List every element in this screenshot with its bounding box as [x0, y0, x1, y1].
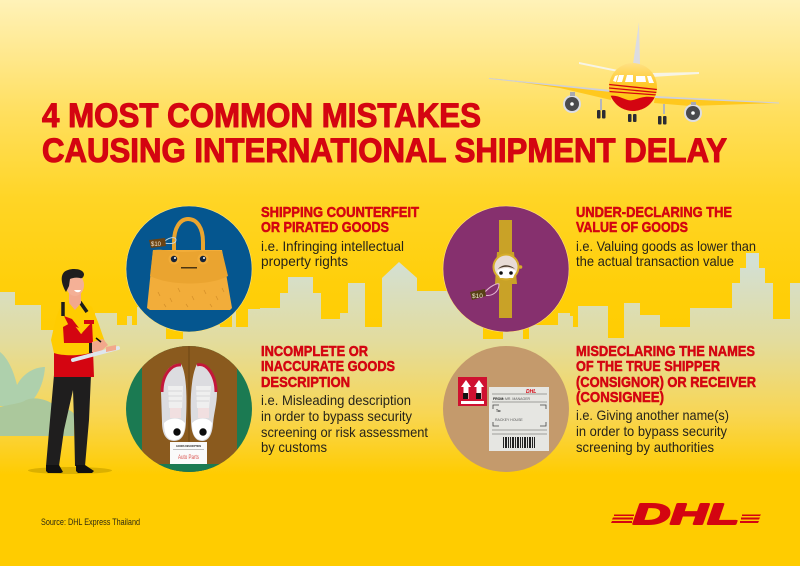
source note: Source: DHL Express Thailand	[41, 517, 140, 527]
text: under-declaring: the actual transaction value	[576, 253, 734, 269]
heading: misdeclaring names: OF THE TRUE SHIPPER	[576, 358, 720, 375]
icon: parcel with label	[443, 346, 569, 472]
text: inaccurate description: i.e. Misleading description	[261, 392, 411, 408]
engines	[563, 92, 702, 122]
icon: sneakers in box: GOODS DESCRIPTION	[176, 444, 201, 448]
text: inaccurate description: in order to bypass security	[261, 408, 412, 424]
tail fin	[633, 22, 640, 64]
title: CAUSING INTERNATIONAL SHIPMENT DELAY	[42, 132, 727, 170]
title	[42, 97, 727, 170]
text: misdeclaring names: i.e. Giving another name(s)	[576, 407, 729, 423]
text: counterfeit	[261, 238, 404, 269]
courier figure	[28, 269, 118, 474]
icon: watch: $10	[472, 293, 483, 300]
icon: sneakers in box	[126, 346, 252, 472]
heading: misdeclaring names	[576, 343, 756, 406]
DHL logo	[611, 499, 761, 531]
heading: under-declaring: UNDER-DECLARING THE	[576, 204, 732, 221]
icon: sneakers in box: Auto Parts	[178, 455, 199, 461]
shipping label: To:	[496, 409, 501, 413]
wings	[489, 78, 779, 106]
heading: misdeclaring names: (CONSIGNEE)	[576, 389, 664, 406]
plants	[0, 352, 74, 436]
text: counterfeit: i.e. Infringing intellectual	[261, 238, 404, 254]
heading: counterfeit: OR PIRATED GOODS	[261, 219, 389, 236]
heading: under-declaring: VALUE OF GOODS	[576, 219, 688, 236]
panel: under-declaring	[443, 204, 756, 332]
DHL logo: DHL	[633, 499, 739, 531]
heading: counterfeit: SHIPPING COUNTERFEIT	[261, 204, 420, 221]
fuselage	[609, 62, 657, 112]
panel: misdeclaring names	[443, 343, 756, 472]
shipping label: RACKEY HOUSE	[495, 418, 523, 422]
panel: inaccurate description	[126, 343, 428, 472]
shipping label: MR. MANAGER	[505, 397, 531, 401]
text: under-declaring: i.e. Valuing goods as lower than	[576, 238, 756, 254]
text: misdeclaring names: in order to bypass security	[576, 423, 727, 439]
heading: misdeclaring names: MISDECLARING THE NAMES	[576, 343, 755, 360]
text: misdeclaring names: screening by authorities	[576, 439, 714, 455]
title: 4 MOST COMMON MISTAKES	[42, 97, 481, 135]
text: inaccurate description: by customs	[261, 439, 327, 455]
icon: watch	[443, 206, 569, 332]
panel: counterfeit goods	[126, 204, 420, 332]
shipping label: FROM:	[493, 397, 504, 401]
shipping label	[489, 387, 549, 451]
text: under-declaring	[576, 238, 756, 269]
heading: inaccurate description: INCOMPLETE OR	[261, 343, 368, 360]
city skyline	[0, 253, 800, 480]
icon: handbag	[126, 206, 252, 332]
icon: this way up sticker	[458, 377, 487, 406]
landing gear	[597, 99, 666, 124]
shipping label: DHL	[526, 389, 536, 395]
airplane illustration	[489, 22, 779, 124]
heading: misdeclaring names: (CONSIGNOR) OR RECEIVER	[576, 374, 756, 391]
heading: counterfeit	[261, 204, 420, 236]
icon: handbag: $10	[151, 242, 162, 248]
text: inaccurate description	[261, 392, 428, 455]
text: misdeclaring names	[576, 407, 729, 455]
heading: under-declaring	[576, 204, 732, 236]
stabilizers	[579, 62, 699, 77]
text: counterfeit: property rights	[261, 253, 348, 269]
text: inaccurate description: screening or risk assessment	[261, 424, 428, 440]
heading: inaccurate description: INACCURATE GOODS	[261, 358, 395, 375]
heading: inaccurate description: DESCRIPTION	[261, 374, 350, 391]
heading: inaccurate description	[261, 343, 395, 391]
